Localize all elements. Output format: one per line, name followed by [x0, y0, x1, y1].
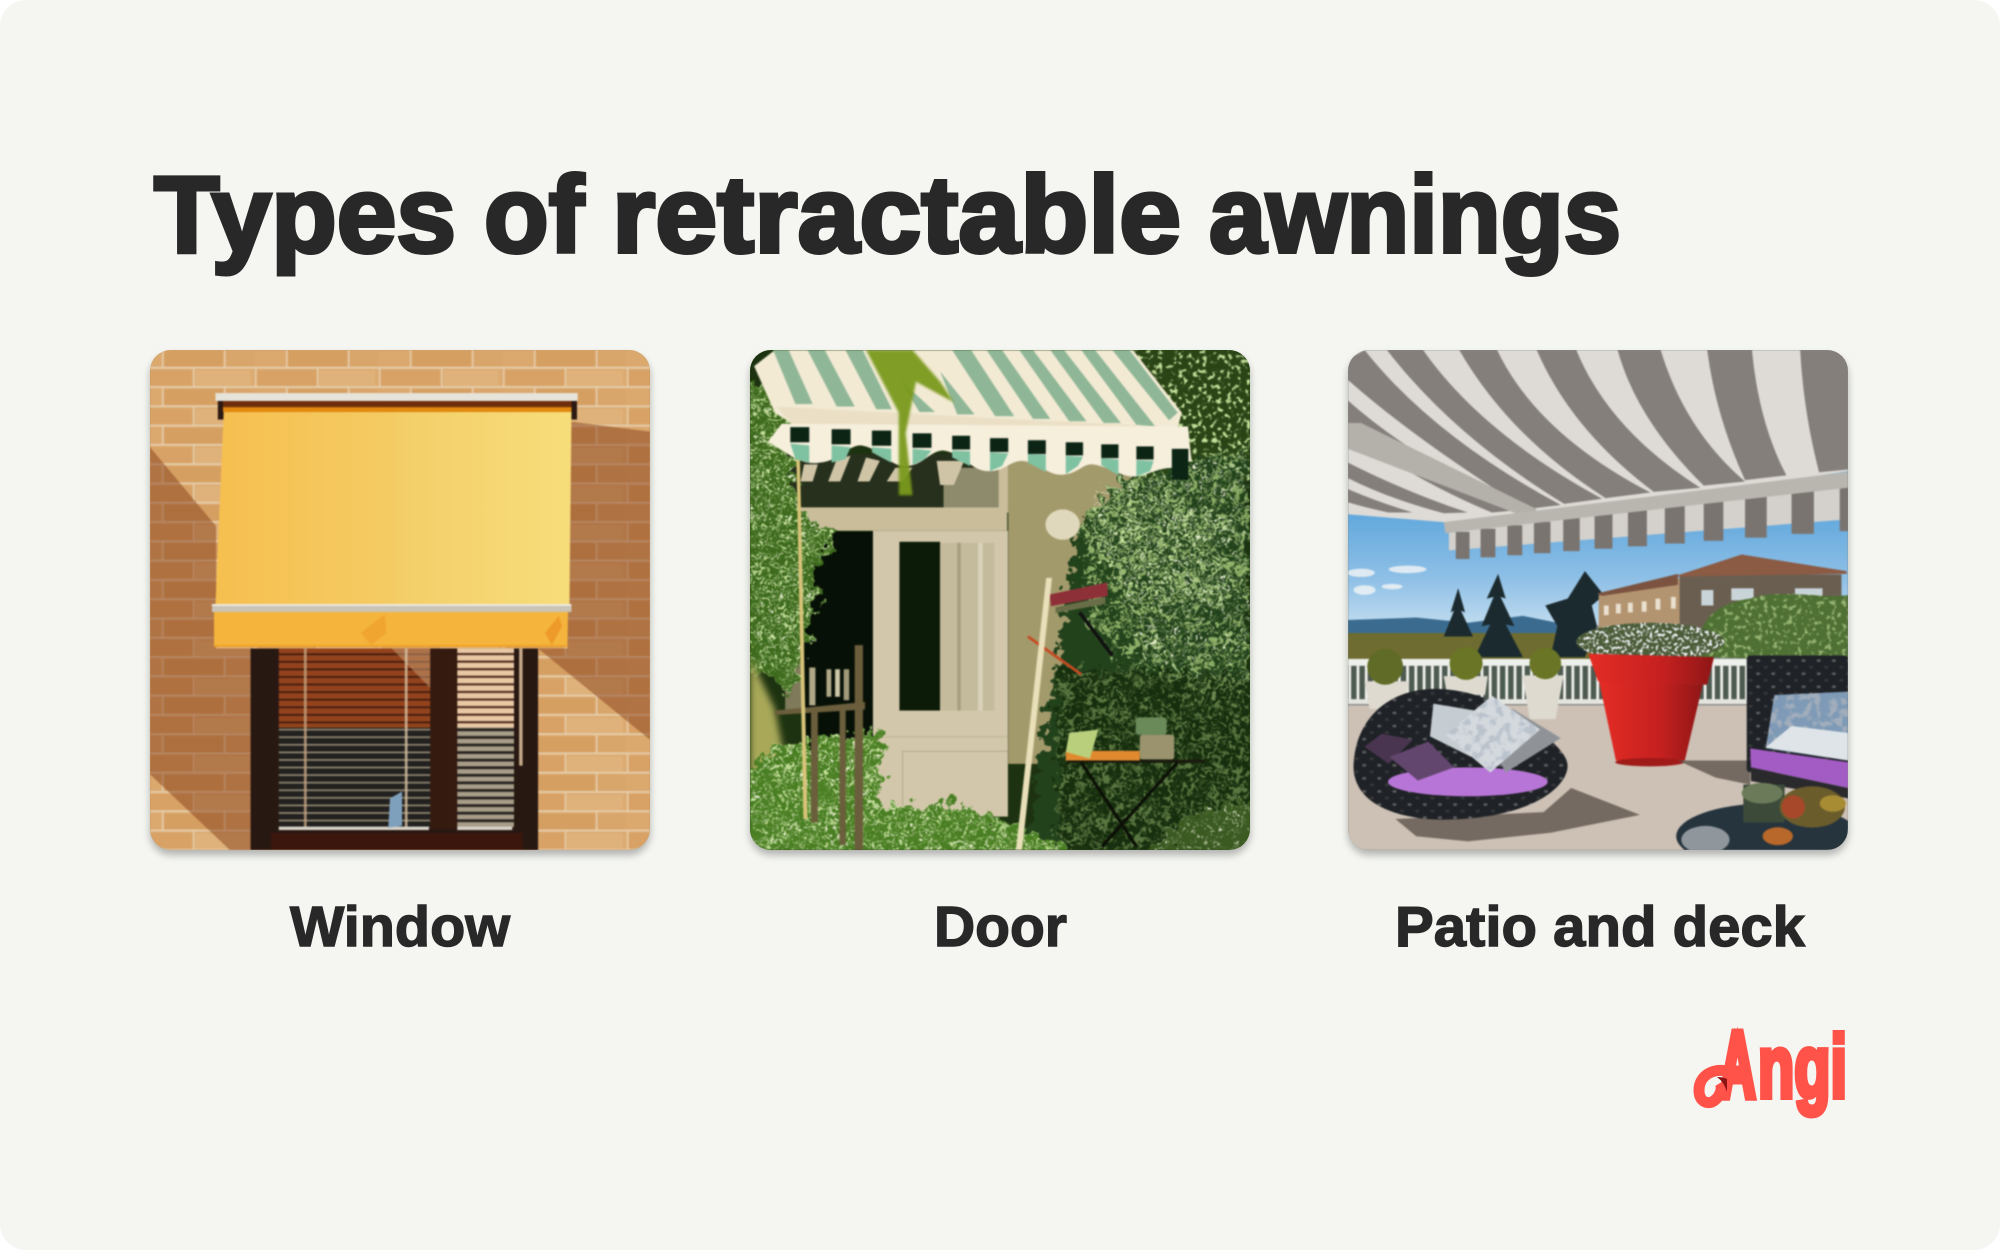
blurred foreground leaf: [866, 350, 954, 495]
round wicker chair: [1354, 689, 1568, 820]
dark doorway: [804, 531, 873, 817]
right wicker chair: [1747, 655, 1848, 798]
upper right foliage: [1133, 350, 1250, 481]
building: [1597, 555, 1847, 633]
blurred left ground: [750, 657, 789, 850]
valance with front bar: [1444, 472, 1848, 559]
broom: [1028, 582, 1112, 674]
clouds: [1347, 566, 1427, 595]
door: [873, 531, 1008, 817]
mountains: [1348, 616, 1557, 640]
red pot: [1588, 654, 1714, 766]
logo: Angi: [1694, 1014, 1847, 1118]
right foliage: [1026, 447, 1250, 850]
valance: [768, 424, 1191, 480]
planters: [1365, 647, 1564, 719]
label: Door: Door: [934, 895, 1067, 959]
title: [153, 154, 1621, 277]
brick wall: [150, 350, 650, 850]
tree line: [1348, 633, 1596, 664]
sill: [271, 833, 523, 850]
valance: [214, 612, 568, 647]
railing: [1348, 659, 1747, 704]
front bar: [212, 604, 571, 612]
wooden stakes: [775, 645, 865, 850]
bamboo pole: [795, 411, 808, 819]
terrace floor: [1348, 705, 1848, 850]
title: retractable: [612, 154, 1181, 276]
pot and chair shadows: [1396, 760, 1750, 841]
pine trees: [1444, 571, 1604, 657]
window blinds: [279, 649, 523, 830]
title: Types: [154, 154, 456, 276]
awning top: [754, 350, 1182, 441]
door frame: [785, 464, 1008, 710]
wall lamp: [1045, 509, 1080, 540]
table with flowers and fruit: [1676, 783, 1859, 869]
label: Patio and deck: Patio and deck: [1395, 895, 1805, 959]
panel: window awning photo: [150, 350, 650, 850]
area under awning: [785, 454, 1007, 513]
label: Window: Window: [290, 895, 511, 959]
yellow fabric: [215, 412, 571, 606]
hedge: [1697, 594, 1848, 661]
awning cassette: [215, 393, 578, 420]
logo: Angi: A: [1720, 1014, 1755, 1116]
wall shadows: [150, 421, 650, 850]
logo: Angi: ngi: [1758, 1017, 1847, 1116]
panel: door awning photo: [750, 350, 1250, 850]
wall: [1008, 461, 1132, 764]
panel: patio and deck awning photo: [1348, 350, 1848, 850]
long pole: [1016, 578, 1052, 850]
title: of: [484, 154, 585, 276]
window frame: [251, 649, 538, 850]
awning canopy: [1348, 350, 1848, 522]
title: awnings: [1209, 154, 1621, 276]
left foliage: [737, 375, 837, 695]
flowers: [1576, 623, 1724, 661]
bottom foliage: [737, 729, 1260, 860]
sky: [1348, 350, 1848, 625]
garden table: [1066, 717, 1205, 847]
